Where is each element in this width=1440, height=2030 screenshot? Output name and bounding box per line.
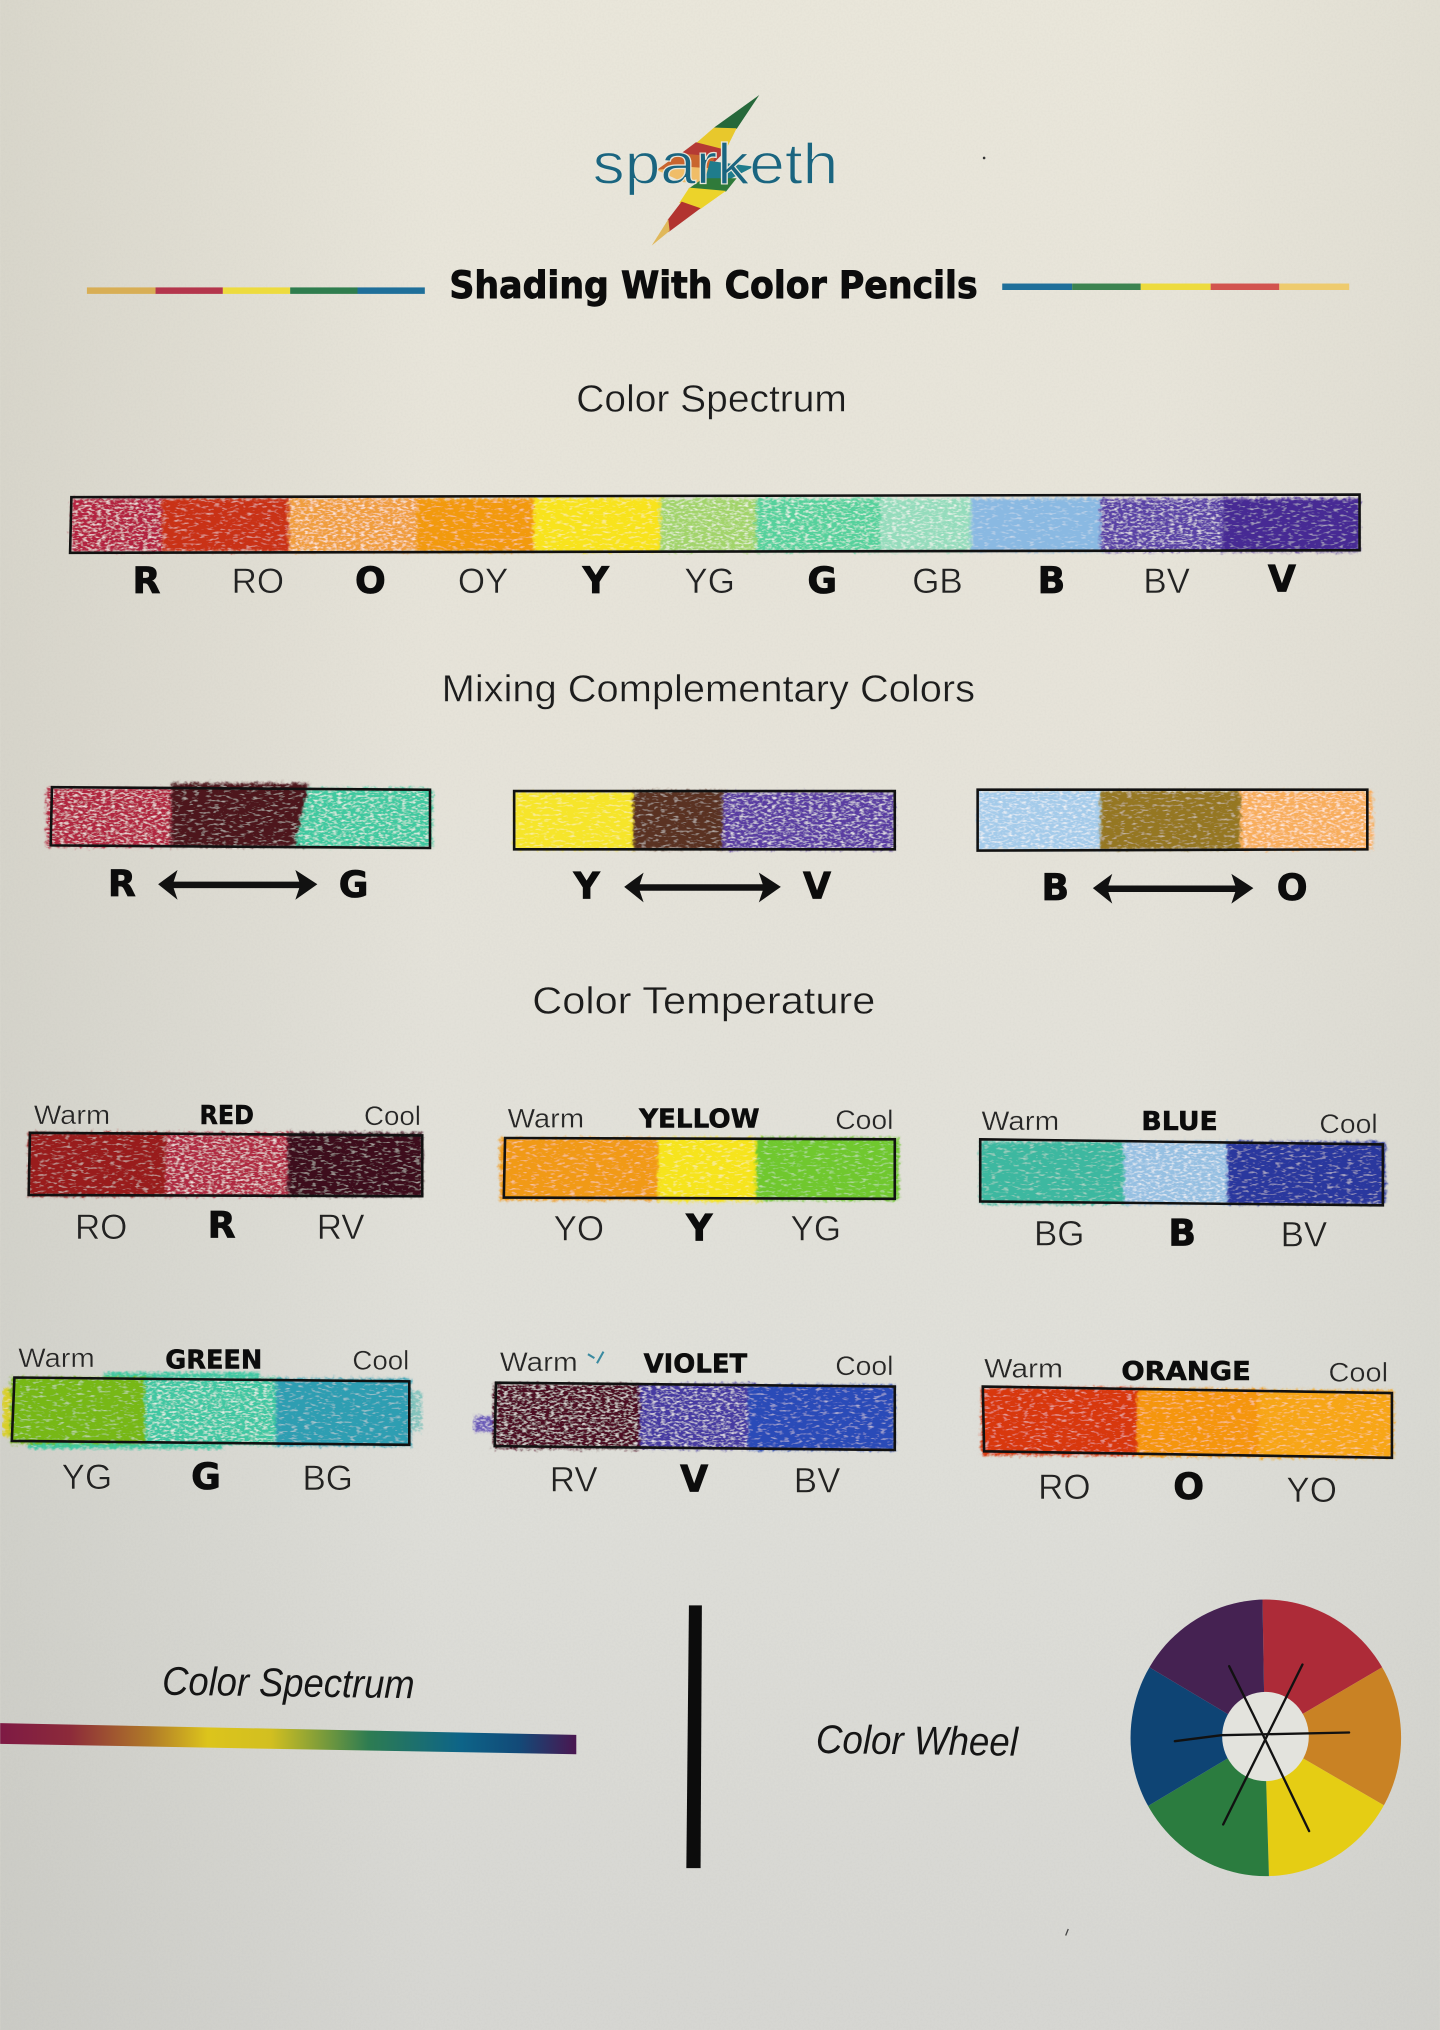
- panel: blue to orange mix: [978, 790, 1372, 909]
- panel: orange temperature: RO: [1038, 1468, 1091, 1507]
- panel: red temperature: Warm: [34, 1099, 110, 1130]
- panel: blue temperature: BV: [1281, 1216, 1328, 1255]
- panel: yellow to violet mix: [514, 791, 895, 907]
- panel: red temperature: R: [208, 1204, 236, 1247]
- panel: yellow temperature: YO: [554, 1209, 604, 1248]
- spectrum labels: V: [1268, 558, 1296, 601]
- panel: yellow temperature: YG: [791, 1209, 841, 1248]
- color wheel: [1130, 1600, 1402, 1876]
- swatch: blue: [980, 1139, 1385, 1205]
- heading: Mixing Complementary Colors: Mixing Complementary Colors: [442, 668, 975, 710]
- spectrum labels: R: [133, 559, 161, 602]
- panel: red temperature: Cool: [364, 1100, 421, 1131]
- panel: violet temperature: V: [680, 1457, 708, 1500]
- panel: green temperature: GREEN: [165, 1345, 262, 1375]
- swatch: yellow: [500, 1138, 899, 1201]
- swatch: red: [29, 1133, 422, 1196]
- panel: violet temperature: VIOLET: [644, 1349, 748, 1379]
- mix labels B O: B: [1041, 866, 1069, 909]
- swatch: yellow violet: [514, 791, 895, 849]
- panel: orange temperature: O: [1173, 1465, 1204, 1508]
- panel: red temperature: [29, 1099, 422, 1247]
- icon: lightning bolt: [652, 95, 759, 246]
- heading: Color Spectrum: Color Spectrum: [576, 378, 847, 420]
- panel: blue temperature: BG: [1034, 1214, 1084, 1253]
- swatch: red green: [47, 783, 433, 848]
- panel: blue temperature: B: [1168, 1211, 1196, 1254]
- arrow: [624, 873, 781, 902]
- spectrum labels: G: [807, 559, 837, 602]
- spectrum labels: RO: [232, 562, 284, 601]
- panel: red temperature: RV: [317, 1208, 365, 1247]
- spectrum labels: B: [1038, 559, 1065, 602]
- panel: blue temperature: [980, 1105, 1385, 1255]
- panel: orange temperature: Cool: [1328, 1356, 1388, 1387]
- title rule: right: [1002, 284, 1349, 290]
- caption: Color Wheel: Color Wheel: [816, 1717, 1019, 1765]
- spectrum labels: Y: [582, 559, 610, 602]
- panel: blue temperature: Cool: [1319, 1108, 1378, 1139]
- vertical divider: [686, 1605, 702, 1868]
- caption: Color Spectrum: Color Spectrum: [162, 1659, 415, 1707]
- swatch: violet: [474, 1383, 895, 1450]
- swatch: blue orange: [978, 790, 1372, 851]
- panel: violet temperature: Cool: [835, 1350, 893, 1381]
- panel: green temperature: [3, 1342, 422, 1498]
- mix labels Y V: Y: [573, 864, 601, 907]
- panel: red to green mix: G: [339, 863, 368, 906]
- panel: green temperature: Cool: [352, 1345, 409, 1376]
- panel: blue to orange mix: O: [1277, 866, 1308, 909]
- swatch: green: [3, 1372, 422, 1449]
- panel: violet temperature: [474, 1346, 895, 1501]
- spectrum labels: BV: [1143, 562, 1191, 601]
- gradient spectrum bar: [0, 1723, 576, 1754]
- panel: violet temperature: BV: [794, 1462, 841, 1501]
- panel: blue temperature: Warm: [982, 1105, 1059, 1136]
- panel: blue temperature: BLUE: [1141, 1107, 1218, 1137]
- panel: yellow temperature: [500, 1103, 899, 1249]
- panel: color spectrum swatch: [70, 495, 1360, 553]
- panel: yellow temperature: Cool: [835, 1104, 893, 1135]
- panel: orange temperature: YO: [1286, 1471, 1337, 1510]
- panel: orange temperature: [982, 1352, 1393, 1510]
- panel: orange temperature: Warm: [984, 1353, 1063, 1384]
- panel: green temperature: Warm: [18, 1342, 95, 1373]
- title: Shading With Color Pencils: [449, 263, 978, 307]
- panel: green temperature: BG: [302, 1459, 353, 1498]
- arrow: [1093, 874, 1253, 904]
- panel: green temperature: G: [191, 1455, 221, 1498]
- mix labels R G: R: [108, 862, 136, 905]
- panel: yellow to violet mix: V: [803, 864, 831, 907]
- heading: Color Temperature: Color Temperature: [532, 980, 875, 1022]
- panel: red temperature: RED: [200, 1101, 254, 1131]
- panel: green temperature: YG: [62, 1458, 112, 1497]
- swatch: orange: [982, 1387, 1393, 1458]
- panel: orange temperature: ORANGE: [1121, 1357, 1251, 1387]
- spectrum labels: [133, 558, 1296, 602]
- spectrum labels: O: [355, 559, 386, 602]
- spectrum labels: YG: [684, 562, 735, 601]
- panel: violet temperature: RV: [550, 1460, 598, 1499]
- panel: violet temperature: Warm: [500, 1346, 578, 1377]
- panel: yellow temperature: Y: [685, 1206, 713, 1249]
- hand-drawn axis lines: [1175, 1665, 1349, 1831]
- logo: sparketh lightning bolt and wordmark: [593, 95, 838, 246]
- spectrum labels: OY: [458, 562, 508, 601]
- wordmark: sparketh: [593, 132, 838, 196]
- wheel slices: [1130, 1600, 1402, 1876]
- arrow: [158, 870, 317, 900]
- panel: red temperature: RO: [75, 1208, 127, 1247]
- panel: yellow temperature: YELLOW: [638, 1105, 759, 1135]
- wheel centre hole: [1222, 1692, 1309, 1781]
- spectrum labels: GB: [912, 562, 963, 601]
- panel: yellow temperature: Warm: [508, 1103, 584, 1134]
- panel: red to green mix: [47, 783, 433, 906]
- title rule: left: [87, 287, 425, 294]
